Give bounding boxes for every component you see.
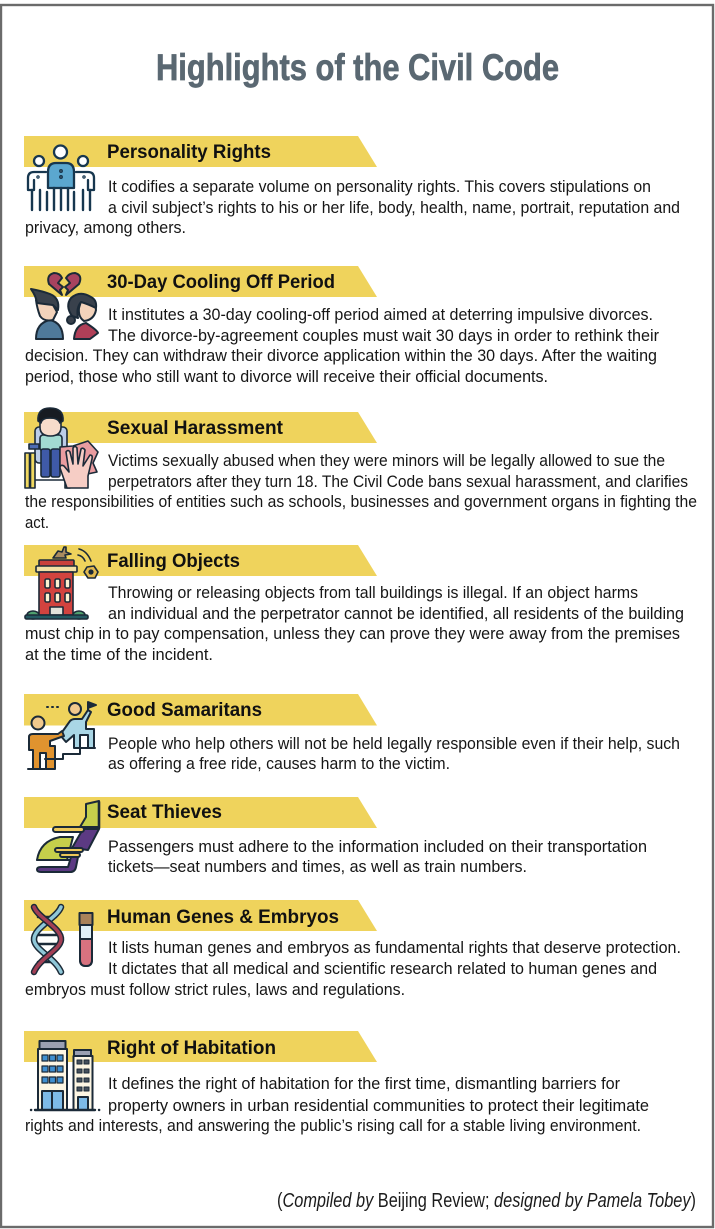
body text (25, 178, 680, 237)
heading: Personality Rights (107, 141, 271, 163)
icon: child in wheelchair and hand (25, 408, 98, 488)
body text (25, 306, 660, 386)
body text: Passengers must adhere to the information included on their transportation (108, 838, 647, 856)
heading banner (24, 1031, 377, 1062)
body text: People who help others will not be held legally responsible even if their help, such (108, 735, 680, 753)
body text: privacy, among others. (25, 219, 186, 237)
heading: Human Genes & Embryos (107, 906, 339, 928)
panel: right of habitation (24, 1031, 649, 1135)
icon: broken heart and couple (31, 273, 98, 339)
body text: the responsibilities of entities such as schools, businesses and government organs in fighting the (25, 493, 697, 511)
heading banner (24, 412, 377, 443)
icon: building with falling object (25, 547, 98, 619)
heading banner (24, 900, 377, 931)
panel: 30-day cooling off period (24, 266, 660, 386)
panel: seat thieves (24, 797, 647, 876)
panel: human genes and embryos (24, 900, 681, 999)
icon: train seat (37, 801, 99, 872)
body text: at the time of the incident. (25, 646, 213, 664)
icon: helping person on stairs (28, 702, 96, 769)
body text (108, 735, 680, 773)
panel: good samaritans (24, 694, 680, 773)
icon: DNA helix and test tube (34, 907, 92, 972)
body text: an individual and the perpetrator cannot be identified, all residents of the building (108, 605, 684, 623)
body text: It defines the right of habitation for the first time, dismantling barriers for (108, 1075, 621, 1093)
body text (25, 584, 684, 664)
body text: Throwing or releasing objects from tall buildings is illegal. If an object harms (108, 584, 638, 602)
heading banner (24, 797, 377, 828)
panel: falling objects (24, 545, 684, 664)
heading: Falling Objects (107, 550, 240, 572)
body text: perpetrators after they turn 18. The Civil Code bans sexual harassment, and clarifies (108, 473, 688, 491)
body text: must chip in to pay compensation, unless they can prove they were away from the premises (25, 625, 680, 643)
body text: It dictates that all medical and scientific research related to human genes and (108, 960, 657, 978)
body text: a civil subject’s rights to his or her life, body, health, name, portrait, reputation and (108, 199, 680, 217)
body text (25, 1075, 649, 1135)
body text (25, 939, 681, 999)
body text: act. (25, 514, 49, 532)
title: Highlights of the Civil Code (156, 47, 559, 88)
heading banner (24, 545, 377, 576)
heading: Sexual Harassment (107, 417, 283, 439)
body text: property owners in urban residential communities to protect their legitimate (108, 1097, 649, 1115)
body text: decision. They can withdraw their divorce application within the 30 days. After the waiting (25, 347, 657, 365)
heading: Good Samaritans (107, 699, 262, 721)
heading banner (24, 694, 377, 726)
body text: It lists human genes and embryos as fundamental rights that deserve protection. (108, 939, 681, 957)
heading: Seat Thieves (107, 801, 222, 823)
body text: It institutes a 30-day cooling-off period aimed at deterring impulsive divorces. (108, 306, 653, 324)
icon: group of people (28, 146, 94, 210)
body text: Victims sexually abused when they were minors will be legally allowed to sue the (108, 452, 665, 470)
body text: It codifies a separate volume on personality rights. This covers stipulations on (108, 178, 651, 196)
body text: tickets—seat numbers and times, as well as train numbers. (108, 858, 527, 876)
body text: The divorce-by-agreement couples must wait 30 days in order to rethink their (108, 327, 660, 345)
body text: embryos must follow strict rules, laws and regulations. (25, 981, 405, 999)
heading: 30-Day Cooling Off Period (107, 271, 335, 293)
icon: apartment towers (31, 1041, 99, 1110)
heading banner (24, 136, 377, 167)
panel: personality rights (24, 136, 680, 237)
heading banner (24, 266, 377, 297)
body text: as offering a free ride, causes harm to the victim. (108, 755, 450, 773)
heading: Right of Habitation (107, 1037, 276, 1059)
body text: rights and interests, and answering the public’s rising call for a stable living environment. (25, 1117, 641, 1135)
body text (108, 838, 647, 876)
panel: sexual harassment (24, 408, 697, 532)
body text (25, 452, 697, 532)
body text: period, those who still want to divorce will receive their official documents. (25, 368, 548, 386)
